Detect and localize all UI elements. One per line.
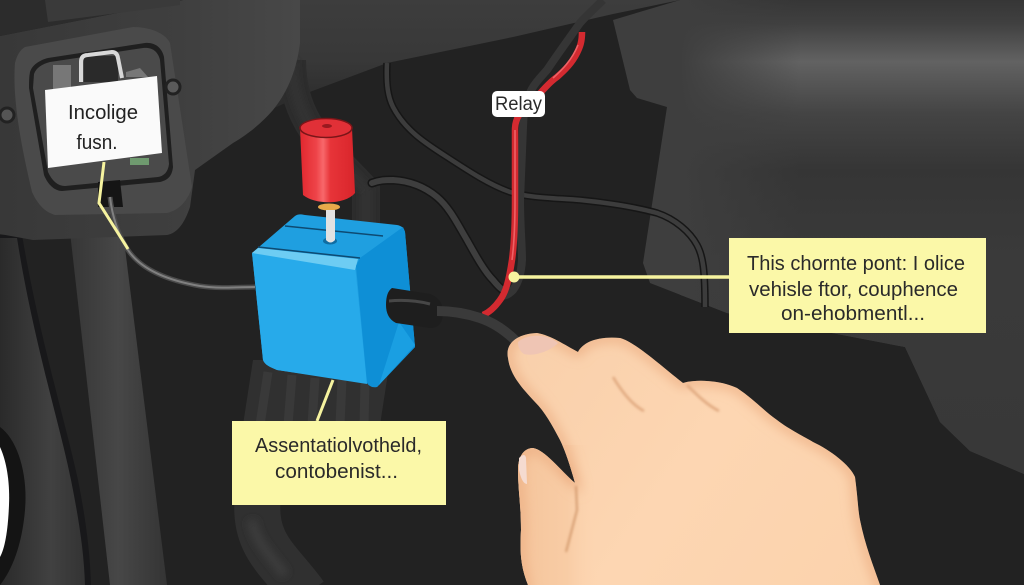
left steering column [70, 232, 167, 585]
wire from fuse panel [110, 197, 255, 288]
dashboard top band [270, 0, 680, 110]
callout: relay note: vehisle ftor, couphence [749, 279, 958, 301]
pipe under callout [252, 495, 305, 585]
red component [300, 118, 355, 242]
blue module [252, 214, 415, 387]
cable to hand [437, 311, 517, 342]
label: relay: Relay [495, 94, 542, 115]
pedal [243, 360, 390, 425]
centre tube [292, 60, 366, 245]
middle black wire [372, 180, 503, 290]
upper black wire [387, 63, 705, 307]
callout: fuse label: fusn. [76, 132, 118, 154]
red wire [483, 32, 582, 315]
callout: module: Assentatiolvotheld, [255, 435, 422, 457]
module callout leader [317, 380, 333, 421]
callout: fuse label [45, 76, 162, 168]
lower left panel [0, 235, 91, 585]
fuse callout leader [99, 162, 128, 249]
black wire behind relay cable [500, 0, 603, 296]
callout: module: contobenist... [275, 461, 398, 483]
right dashboard panel [600, 0, 1024, 480]
relay leader and dot [508, 272, 730, 282]
fuse panel housing [0, 0, 300, 240]
callout: relay note [729, 238, 986, 333]
callout: module [232, 421, 446, 505]
hand [500, 325, 890, 585]
callout: relay note: This chornte pont: I olice [747, 253, 965, 275]
connector at fuse panel [98, 180, 123, 207]
callout: fuse label: Incolige [68, 102, 138, 124]
grommet on module [386, 288, 443, 328]
callout: relay note: on-ehobmentl... [781, 303, 925, 325]
